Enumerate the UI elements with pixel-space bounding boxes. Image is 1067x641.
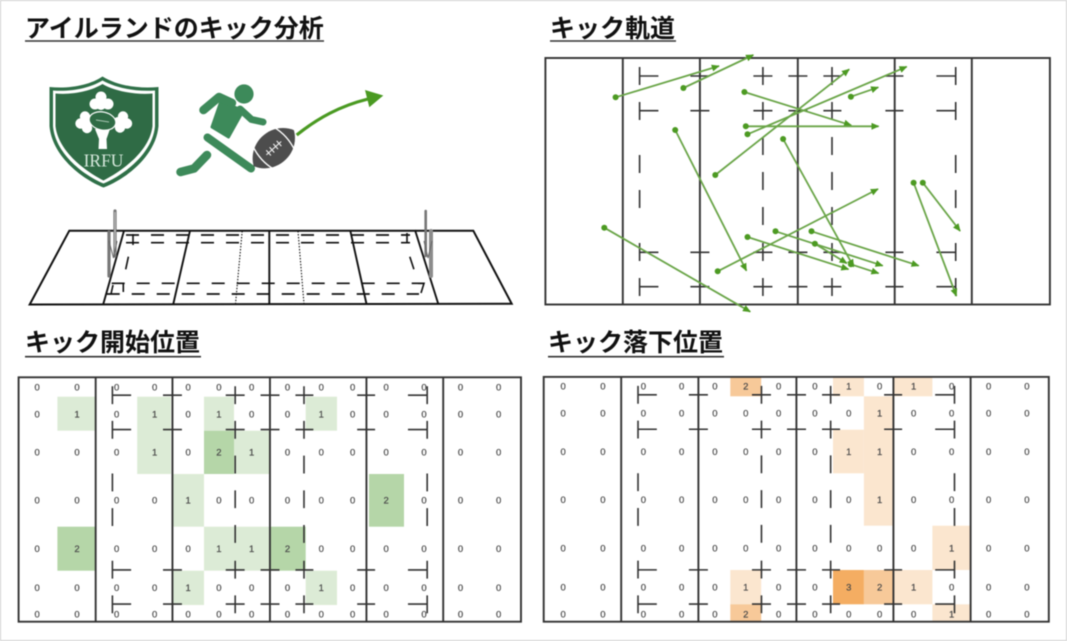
cell counts: landing: 00000200101000 (561, 382, 1030, 393)
panel: kick landing heatmap (544, 329, 1049, 622)
cell counts: landing: 00000200000100 (561, 609, 1030, 620)
heading: kick start position: キック開始位置 (25, 329, 200, 357)
cell counts: start: 00000000000000 (35, 610, 501, 621)
cell counts: landing (561, 382, 1030, 620)
heatmap cells: start (57, 397, 404, 605)
pitch lines: start (19, 377, 521, 622)
icon: rugby ball (243, 118, 305, 179)
heatmap cells: landing (730, 377, 970, 622)
panel: overview (25, 15, 512, 304)
icon: right goal posts (424, 211, 432, 276)
icon: IRFU shield: IRFU (84, 150, 124, 170)
cell counts: start: 00001000002000 (35, 496, 501, 507)
pitch lines (545, 58, 1050, 304)
cell counts: landing: 00000000010000 (561, 495, 1030, 506)
heading: kick landing position: キック落下位置 (548, 329, 723, 357)
cell counts: landing: 00000100321000 (561, 582, 1030, 593)
pitch lines: landing (544, 377, 1049, 622)
arrow: kick direction (297, 90, 383, 135)
title: Ireland kick analysis: アイルランドのキック分析 (25, 15, 324, 43)
cell counts: landing: 00000000010000 (561, 409, 1030, 420)
heading: kick trajectory: キック軌道 (550, 15, 675, 43)
panel: kick start heatmap (19, 329, 521, 622)
panel: kick trajectories (545, 15, 1050, 312)
cell counts: landing: 00000000000100 (561, 543, 1030, 554)
icon: kicking player (180, 84, 263, 172)
cell counts: start: 00010210000000 (35, 448, 501, 459)
cell counts: start: 01010100100000 (35, 409, 501, 420)
cell counts: start: 00000000000000 (35, 383, 501, 394)
cell counts: landing: 00000000110000 (561, 447, 1030, 458)
icon: left goal posts (109, 211, 117, 276)
cell counts: start (35, 383, 501, 621)
cell counts: start: 02000112000000 (35, 544, 501, 555)
cell counts: start: 00001000100000 (35, 583, 501, 594)
icon: IRFU shield (50, 76, 158, 188)
trajectory start points (601, 85, 926, 274)
trajectory arrows (604, 55, 960, 312)
diagram: perspective pitch (30, 230, 512, 304)
